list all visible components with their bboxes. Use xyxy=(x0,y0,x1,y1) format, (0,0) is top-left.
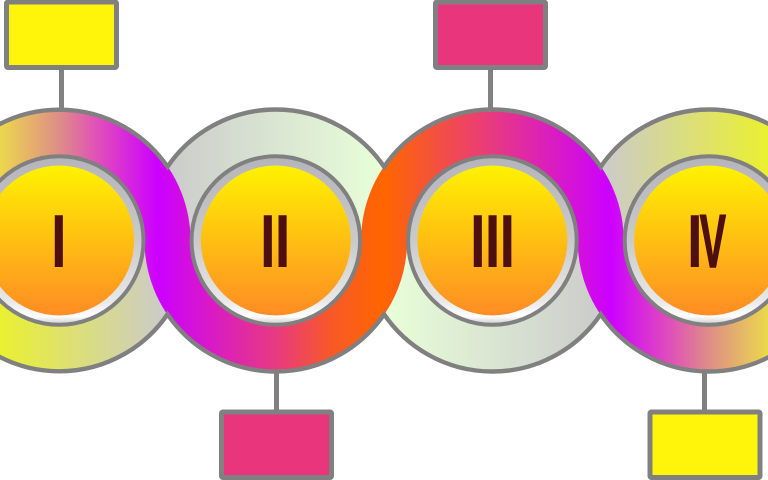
disc III xyxy=(408,156,577,325)
numeral IV: V xyxy=(700,199,726,283)
box: bottom pink label (II) xyxy=(222,412,332,478)
numeral IV xyxy=(687,199,726,283)
numeral III: III xyxy=(470,199,514,283)
stems connecting boxes to circles xyxy=(59,66,707,414)
numeral I: I xyxy=(51,199,66,283)
outer outlines xyxy=(0,110,768,371)
box: top yellow label (I) xyxy=(6,2,116,68)
box: top pink label (III) xyxy=(436,2,546,68)
box: bottom yellow label (IV) xyxy=(650,412,760,478)
disc I xyxy=(0,156,144,325)
numeral II: II xyxy=(260,199,290,283)
numeral IV: I xyxy=(687,199,702,283)
flowing ribbon xyxy=(0,132,768,349)
disc II xyxy=(191,156,360,325)
background ring band xyxy=(0,132,768,349)
disc IV xyxy=(625,156,768,325)
